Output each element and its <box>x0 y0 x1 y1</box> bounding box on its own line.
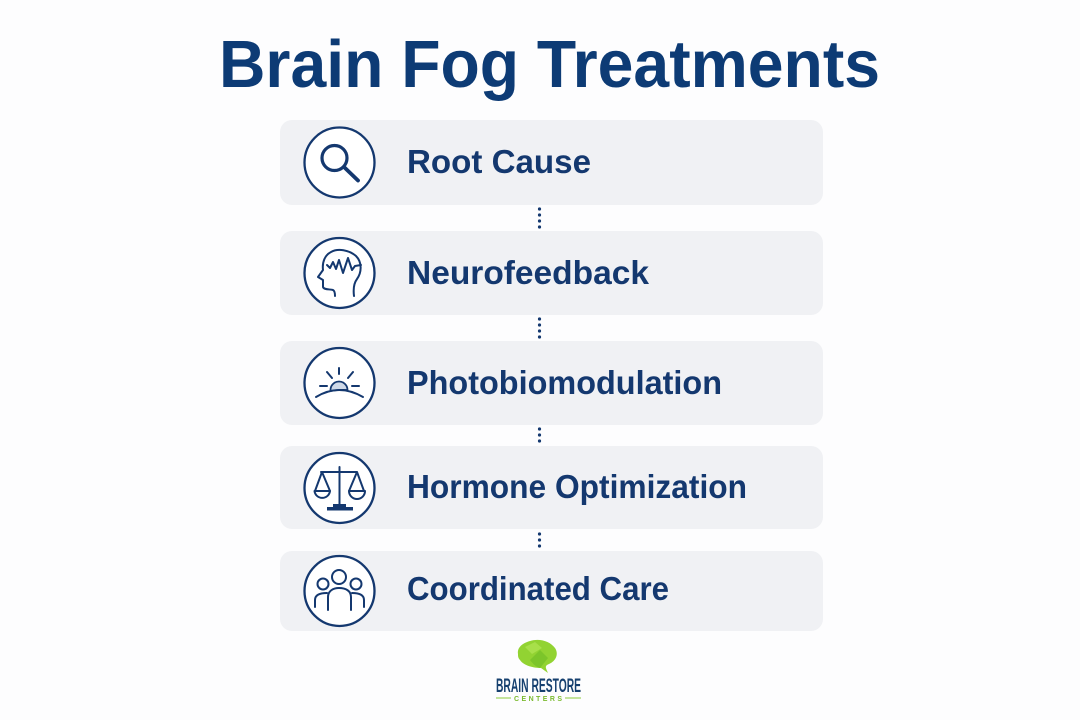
icon: sun over horizon <box>304 348 374 418</box>
label: hormone optimization: Hormone Optimization <box>407 468 747 505</box>
panel: hormone optimization <box>280 446 823 529</box>
icon: head with brain wave <box>304 238 374 308</box>
connector dots <box>538 427 541 443</box>
icon: group of people <box>304 556 374 626</box>
logo subtitle: CENTERS <box>514 696 562 703</box>
title: Brain Fog Treatments <box>219 27 880 102</box>
panel: neurofeedback <box>280 231 823 315</box>
icon: balance scale <box>304 453 374 523</box>
panel: root cause <box>280 120 823 205</box>
label: photobiomodulation: Photobiomodulation <box>407 364 722 401</box>
logo: brain restore centers <box>496 640 581 703</box>
label: root cause: Root Cause <box>407 143 591 180</box>
logo wordmark: BRAIN RESTORE <box>496 676 581 697</box>
label: neurofeedback: Neurofeedback <box>407 254 650 291</box>
connector dots <box>538 317 541 339</box>
panel: photobiomodulation <box>280 341 823 425</box>
panel: coordinated care <box>280 551 823 631</box>
icon: green brain <box>518 640 557 673</box>
icon: magnifying glass <box>304 128 374 198</box>
label: coordinated care: Coordinated Care <box>407 570 669 607</box>
connector dots <box>538 207 541 229</box>
connector dots <box>538 532 541 548</box>
